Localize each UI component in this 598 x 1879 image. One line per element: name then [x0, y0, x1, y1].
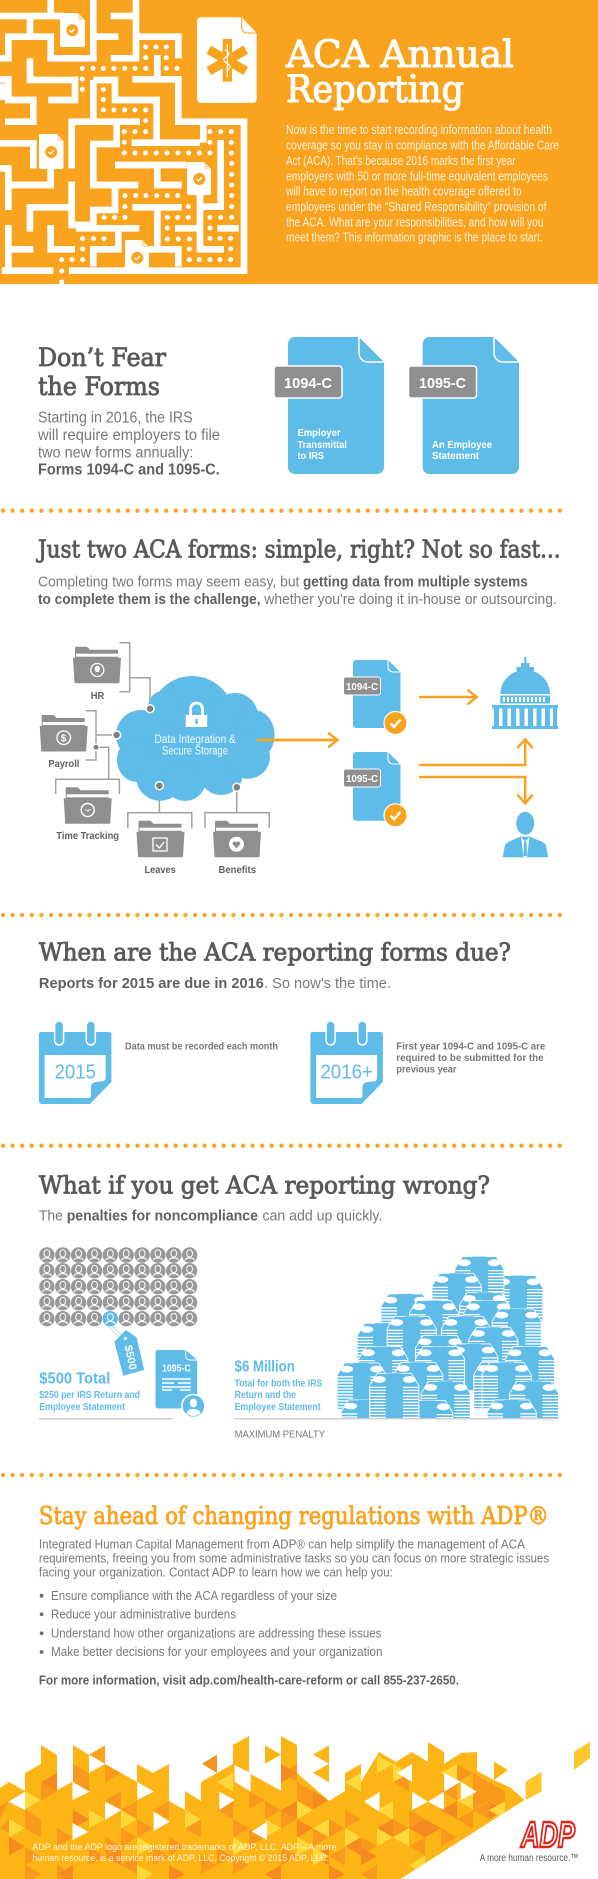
calendar 2016+ [310, 1021, 383, 1104]
folder: Benefits [213, 821, 261, 876]
money pile [338, 1256, 558, 1418]
paragraph: Integrated Human Capital Management from ADP® can help simplify the management of ACA [39, 1538, 525, 1552]
penalty text: $6 million: Return and the [235, 1389, 296, 1401]
text block: whether you're doing it in-house or outsourcing. [263, 591, 557, 608]
paragraph: requirements, freeing you from some administrative tasks so you can focus on more strategic issues [39, 1552, 549, 1566]
ADP logo: ADP [520, 1814, 576, 1855]
cloud label: Data Integration & [154, 734, 236, 746]
price tag: $500 [122, 1344, 139, 1371]
ADP logo [480, 1814, 579, 1864]
folder: Leaves: Leaves [144, 864, 176, 876]
form 1095-C icon: 1095-C [162, 1364, 191, 1374]
title: Reporting [286, 68, 464, 111]
legal text: human resource. is a service mark of ADP, LLC. Copyright © 2015 ADP, LLC. [32, 1853, 329, 1864]
icon: medical document [197, 17, 257, 103]
form 1094-C: 1094-C [346, 681, 378, 693]
calendar 2015 [39, 1021, 111, 1104]
heading: When are the ACA reporting forms due? [39, 939, 511, 967]
form 1095-C [344, 752, 407, 827]
contact line: For more information, visit adp.com/health-care-reform or call 855-237-2650. [39, 1674, 459, 1688]
subheading: . So now's the time. [264, 975, 391, 992]
form 1094-C: Transmittal [298, 439, 347, 451]
penalty text: $6 million: Total for both the IRS [235, 1378, 322, 1390]
detached mosaic pieces [89, 1742, 590, 1800]
legal text: ADP and the ADP logo are registered trademarks of ADP, LLC. ADP – A more [32, 1842, 336, 1853]
section: penalties [39, 1171, 559, 1447]
employee icon grid [39, 1247, 197, 1326]
cloud label [154, 734, 236, 758]
icon: capitol building [492, 657, 558, 729]
text block: to complete them is the challenge, [38, 591, 260, 608]
folder: Payroll: Payroll [48, 758, 79, 770]
icon: lock [186, 703, 207, 727]
form 1095-C icon [156, 1350, 205, 1418]
subheading: The [39, 1208, 63, 1224]
intro paragraph: meet them? This information graphic is the place to start. [286, 231, 543, 245]
icon: checked document 4 [125, 240, 149, 274]
text: data recorded: Data must be recorded each month [125, 1040, 278, 1052]
legal text [32, 1842, 336, 1864]
text: first year: required to be submitted for the [396, 1052, 544, 1064]
arrow: 1095-C up to IRS [420, 739, 532, 765]
icon: checked document 1 [60, 13, 85, 47]
folder: Time Tracking [56, 787, 119, 842]
connector nodes [93, 705, 241, 791]
intro paragraph: will have to report on the health coverage offered to [285, 185, 522, 199]
calendar 2016+: 2016+ [320, 1062, 373, 1084]
intro paragraph: employers with 50 or more full-time equivalent employees [286, 169, 548, 183]
arrow: to IRS [420, 690, 477, 704]
cloud label: Secure Storage [162, 746, 228, 758]
cloud [116, 676, 275, 801]
bullet list [40, 1589, 382, 1659]
white gaps in mosaic [8, 1764, 477, 1840]
connector lines [56, 643, 269, 828]
subheading: Reports for 2015 are due in 2016 [39, 975, 264, 992]
penalty text: $500: $500 Total [39, 1370, 110, 1387]
baseline rule right [235, 1418, 559, 1420]
text block [38, 574, 557, 608]
text: first year: previous year [396, 1064, 456, 1076]
penalty text: $500: Employee Statement [39, 1401, 125, 1413]
form 1095-C [408, 337, 519, 474]
subheading: can add up quickly. [262, 1208, 382, 1224]
calendar 2015: 2015 [54, 1062, 96, 1084]
header panel [0, 0, 598, 284]
heading [38, 343, 166, 401]
subheading [39, 1208, 382, 1224]
baseline rule left [39, 1418, 172, 1420]
intro paragraph: Act (ACA). That’s because 2016 marks the first year [286, 154, 516, 168]
price tag [108, 1326, 144, 1376]
triangle mosaic [0, 1736, 524, 1879]
bullet list: Make better decisions for your employees and your organization [51, 1645, 382, 1659]
maximum penalty label: MAXIMUM PENALTY [235, 1430, 325, 1440]
maze illustration [0, 0, 244, 282]
form 1094-C [274, 337, 384, 474]
icon: checked document 2 [39, 134, 64, 169]
bullet list: Understand how other organizations are addressing these issues [51, 1626, 381, 1640]
section: don't fear the forms [37, 337, 519, 478]
text block: will require employers to file [37, 427, 220, 444]
form 1095-C: 1095-C [419, 375, 466, 392]
penalty text: $6 million: $6 Million [235, 1359, 295, 1376]
arrow: 1095-C down to employee [420, 777, 532, 803]
folder: Leaves [136, 821, 184, 876]
folder: Payroll: $ [61, 734, 67, 744]
text block [37, 410, 220, 478]
intro paragraph: employees under the “Shared Responsibility” provision of [286, 200, 547, 214]
folder: HR: HR [91, 690, 105, 702]
subheading: penalties for noncompliance [67, 1208, 258, 1224]
form 1094-C: to IRS [298, 450, 324, 462]
text block: Completing two forms may seem easy, but [38, 574, 300, 590]
folder: Payroll [40, 715, 88, 770]
form 1095-C: An Employee [432, 439, 492, 451]
folder: Benefits: Benefits [218, 864, 256, 876]
section: stay ahead with ADP [39, 1502, 549, 1688]
paragraph [39, 1538, 549, 1580]
form 1095-C: Statement [432, 450, 479, 462]
section: just two ACA forms [35, 535, 561, 608]
paragraph: facing your organization. Contact ADP to learn how we can help you: [39, 1566, 393, 1580]
text block: two new forms annually: [38, 444, 193, 462]
heading: the Forms [38, 372, 160, 401]
icon: employee [503, 812, 548, 857]
heading: What if you get ACA reporting wrong? [39, 1171, 490, 1199]
title: ACA Annual [285, 33, 514, 76]
penalty text: $500: $250 per IRS Return and [39, 1389, 140, 1401]
form 1094-C [344, 660, 407, 734]
text: first year [396, 1040, 545, 1076]
footer mosaic [0, 1730, 598, 1879]
heading: Don’t Fear [38, 343, 166, 372]
penalty text: $6 million [235, 1359, 322, 1413]
intro paragraph: the ACA. What are your responsibilities, and how will you [286, 215, 544, 229]
diagram: data flow [40, 643, 558, 876]
text block: getting data from multiple systems [303, 574, 528, 590]
icon: checked document 3 [187, 162, 211, 195]
form 1094-C: Employer [298, 427, 340, 439]
bullet list: Ensure compliance with the ACA regardless of your size [51, 1589, 337, 1603]
intro paragraph [285, 123, 559, 245]
section: when are forms due [39, 939, 545, 1104]
title [285, 33, 514, 111]
penalty text: $500 [39, 1370, 140, 1413]
folder: HR [73, 647, 121, 702]
text: first year: First year 1094-C and 1095-C are [396, 1040, 545, 1052]
penalty text: $6 million: Employee Statement [235, 1401, 321, 1413]
text block: Forms 1094-C and 1095-C. [38, 462, 220, 478]
form 1094-C: 1094-C [284, 375, 332, 392]
text block: Starting in 2016, the IRS [38, 410, 193, 426]
bullet list: Reduce your administrative burdens [51, 1608, 236, 1622]
arrow: cloud to forms [258, 734, 338, 747]
intro paragraph: Now is the time to start recording information about health [286, 123, 552, 137]
subheading [39, 975, 391, 992]
folder: Time Tracking: Time Tracking [56, 830, 119, 842]
form 1095-C: 1095-C [346, 773, 378, 785]
